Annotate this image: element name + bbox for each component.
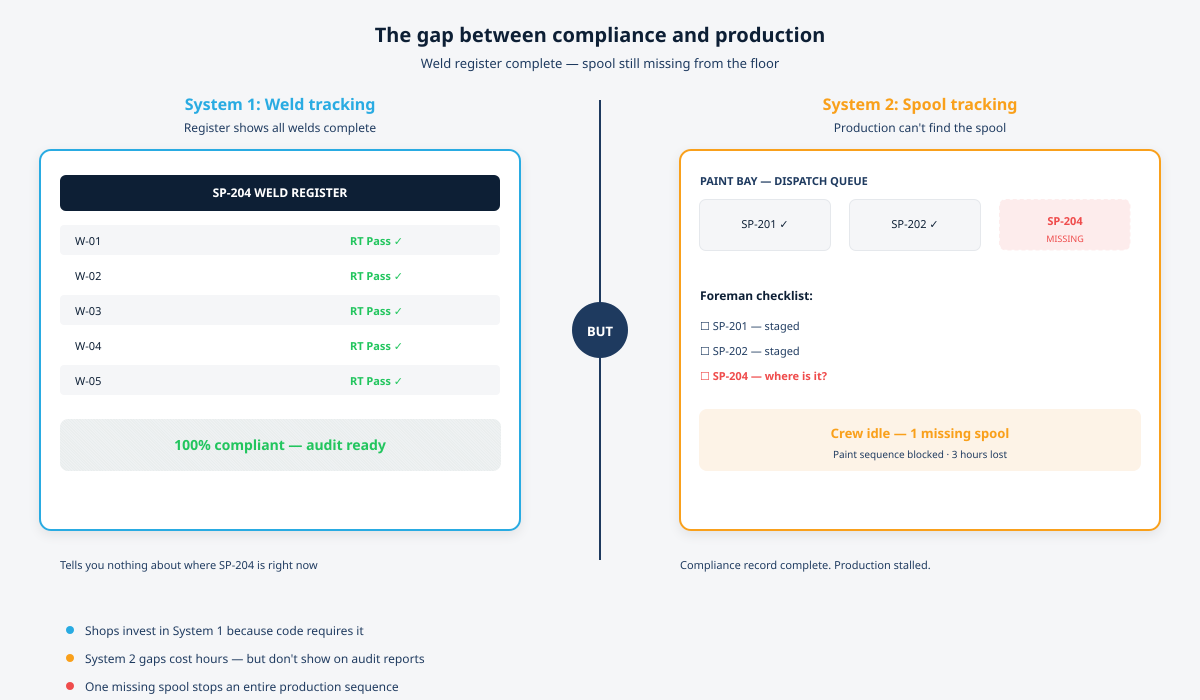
checklist item: ☐ SP-202 — staged — [700, 344, 800, 359]
row W-03 — [60, 295, 500, 325]
heading: system 2: System 2: Spool tracking — [823, 93, 1017, 115]
chip SP-204 missing: SP-204 — [1047, 214, 1083, 229]
title: The gap between compliance and production — [375, 21, 825, 48]
caption: system 2: Compliance record complete. Production stalled. — [680, 558, 931, 573]
divider — [599, 100, 601, 560]
chip SP-204 missing: MISSING — [1046, 232, 1084, 245]
row W-02: W-02 — [75, 269, 101, 284]
row W-05 — [60, 365, 500, 395]
row W-05: RT Pass ✓ — [350, 374, 403, 389]
bullet dot — [66, 654, 74, 662]
bullet text: One missing spool stops an entire production sequence — [85, 678, 399, 695]
checklist item: missing: ☐ SP-204 — where is it? — [700, 369, 827, 384]
row W-02: RT Pass ✓ — [350, 269, 403, 284]
badge: BUT — [572, 302, 628, 358]
panel: weld register — [39, 149, 521, 531]
chip SP-201: SP-201 ✓ — [741, 217, 789, 232]
bullet dot — [66, 626, 74, 634]
register header: SP-204 WELD REGISTER — [213, 184, 347, 201]
row W-04: W-04 — [75, 339, 101, 354]
queue heading: PAINT BAY — DISPATCH QUEUE — [700, 174, 868, 189]
subtitle: Weld register complete — spool still missing from the floor — [421, 54, 779, 72]
bullet dot — [66, 682, 74, 690]
chip SP-202 — [849, 199, 981, 251]
row W-03: RT Pass ✓ — [350, 304, 403, 319]
chip SP-204 missing — [999, 199, 1130, 250]
bullet text: Shops invest in System 1 because code requires it — [85, 622, 364, 639]
caption: system 1: Tells you nothing about where SP-204 is right now — [60, 558, 318, 573]
row W-02 — [75, 269, 403, 284]
callout title: Crew idle — 1 missing spool — [831, 424, 1009, 442]
chip SP-202: SP-202 ✓ — [891, 217, 939, 232]
row W-01: W-01 — [75, 234, 101, 249]
row W-01 — [60, 225, 500, 255]
row W-03: W-03 — [75, 304, 101, 319]
compliance banner: 100% compliant — audit ready — [174, 436, 386, 455]
register header — [60, 175, 500, 211]
heading: system 1: System 1: Weld tracking — [185, 93, 375, 115]
row W-01: RT Pass ✓ — [350, 234, 403, 249]
callout detail: Paint sequence blocked · 3 hours lost — [833, 447, 1007, 461]
subheading: system 2: Production can't find the spool — [834, 119, 1006, 136]
bullet text: System 2 gaps cost hours — but don't show on audit reports — [85, 650, 425, 667]
row W-04: RT Pass ✓ — [350, 339, 403, 354]
checklist item: ☐ SP-201 — staged — [700, 319, 800, 334]
checklist heading: Foreman checklist: — [700, 287, 813, 304]
row W-05: W-05 — [75, 374, 101, 389]
chip SP-201 — [699, 199, 831, 251]
subheading: system 1: Register shows all welds complete — [184, 119, 376, 136]
compliance banner — [60, 419, 500, 471]
idle callout — [699, 409, 1141, 471]
row W-04 — [75, 339, 403, 354]
panel: spool tracking — [679, 149, 1161, 531]
badge: BUT: BUT — [587, 322, 613, 340]
